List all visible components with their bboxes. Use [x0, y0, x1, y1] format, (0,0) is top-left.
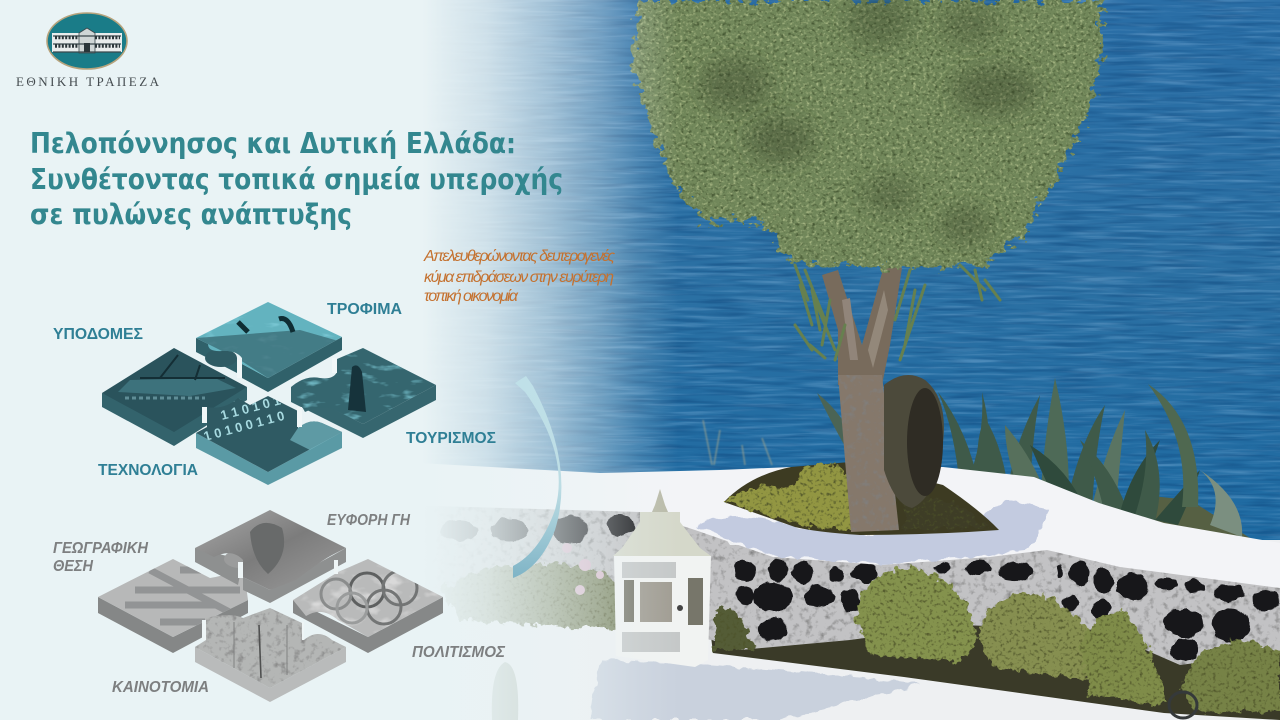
tile: technology: 1 0 1 0 0 1 1 0	[202, 408, 286, 444]
shrubs	[440, 563, 1280, 712]
title: Πελοπόννησος και Δυτική Ελλάδα:	[30, 127, 516, 160]
whitewashed wall cap	[400, 462, 1280, 588]
tile: geographic position	[98, 559, 248, 653]
lower trunk	[838, 375, 899, 532]
title: σε πυλώνες ανάπτυξης	[30, 198, 352, 231]
title: Συνθέτοντας τοπικά σημεία υπεροχής	[30, 163, 563, 196]
lantern	[613, 489, 711, 667]
logo wordmark: ΕΘΝΙΚΗ ΤΡΑΠΕΖΑ	[16, 74, 160, 89]
gaps between grey tiles	[202, 560, 338, 640]
tile: technology: 1 1 0 1 0 1	[219, 393, 282, 423]
callout: secondary effects on the local economy: τοπική οικονομία	[424, 288, 519, 305]
tile: innovation	[195, 608, 346, 702]
planter shrubs	[726, 464, 990, 530]
arrow: from foundations to growth pillars	[513, 376, 561, 578]
tree planter bed	[724, 462, 999, 535]
callout: secondary effects on the local economy: Απελευθερώνοντας δευτερογενές	[423, 248, 615, 265]
labels: local strengths: ΕΥΦΟΡΗ ΓΗ	[327, 512, 410, 529]
callout: secondary effects on the local economy	[423, 248, 615, 305]
olive tree trunks	[822, 262, 902, 385]
dark ornament at edge of terrace	[1169, 692, 1197, 718]
sea	[300, 0, 1280, 560]
logo: National Bank of Greece	[16, 13, 160, 89]
wall cap shadow	[696, 500, 1050, 564]
labels: growth pillars: ΥΠΟΔΟΜΕΣ	[53, 326, 143, 343]
tile: fertile land	[195, 510, 346, 603]
labels: growth pillars: ΤΟΥΡΙΣΜΟΣ	[406, 430, 496, 447]
tile: food	[196, 302, 342, 392]
gaps between tiles	[202, 358, 337, 427]
stone wall	[420, 500, 1280, 665]
tile: technology: 1 0 1 1	[225, 381, 267, 406]
pale statue in the foreground	[492, 662, 518, 720]
puzzle: growth pillars (teal)	[102, 302, 436, 485]
olive tree foliage	[634, 0, 1102, 360]
terrace ground and plant bed	[300, 540, 1280, 720]
labels: local strengths	[53, 512, 506, 696]
callout: secondary effects on the local economy: κύμα επιδράσεων στην ευρύτερη	[424, 269, 614, 286]
labels: growth pillars	[53, 301, 496, 479]
tile: infrastructure	[102, 348, 247, 446]
title	[30, 127, 563, 231]
tile: technology	[196, 396, 342, 485]
tile: tourism	[291, 348, 436, 438]
tile: culture	[293, 559, 443, 653]
labels: local strengths: ΠΟΛΙΤΙΣΜΟΣ	[412, 644, 506, 661]
puzzle: local strengths (grey)	[98, 510, 443, 702]
flowers behind the fade	[562, 543, 604, 595]
faint distant shrub	[703, 420, 772, 465]
round pot on the tree	[884, 375, 944, 508]
labels: local strengths: ΓΕΩΓΡΑΦΙΚΗ	[53, 540, 148, 557]
labels: growth pillars: ΤΕΧΝΟΛΟΓΙΑ	[98, 462, 198, 479]
labels: growth pillars: ΤΡΟΦΙΜΑ	[327, 301, 402, 318]
agave plant	[817, 378, 1250, 540]
labels: local strengths: ΘΕΣΗ	[53, 558, 93, 575]
labels: local strengths: ΚΑΙΝΟΤΟΜΙΑ	[112, 679, 209, 696]
logo emblem	[47, 13, 127, 69]
background photo: olive tree and whitewashed terrace by the sea	[300, 0, 1280, 720]
